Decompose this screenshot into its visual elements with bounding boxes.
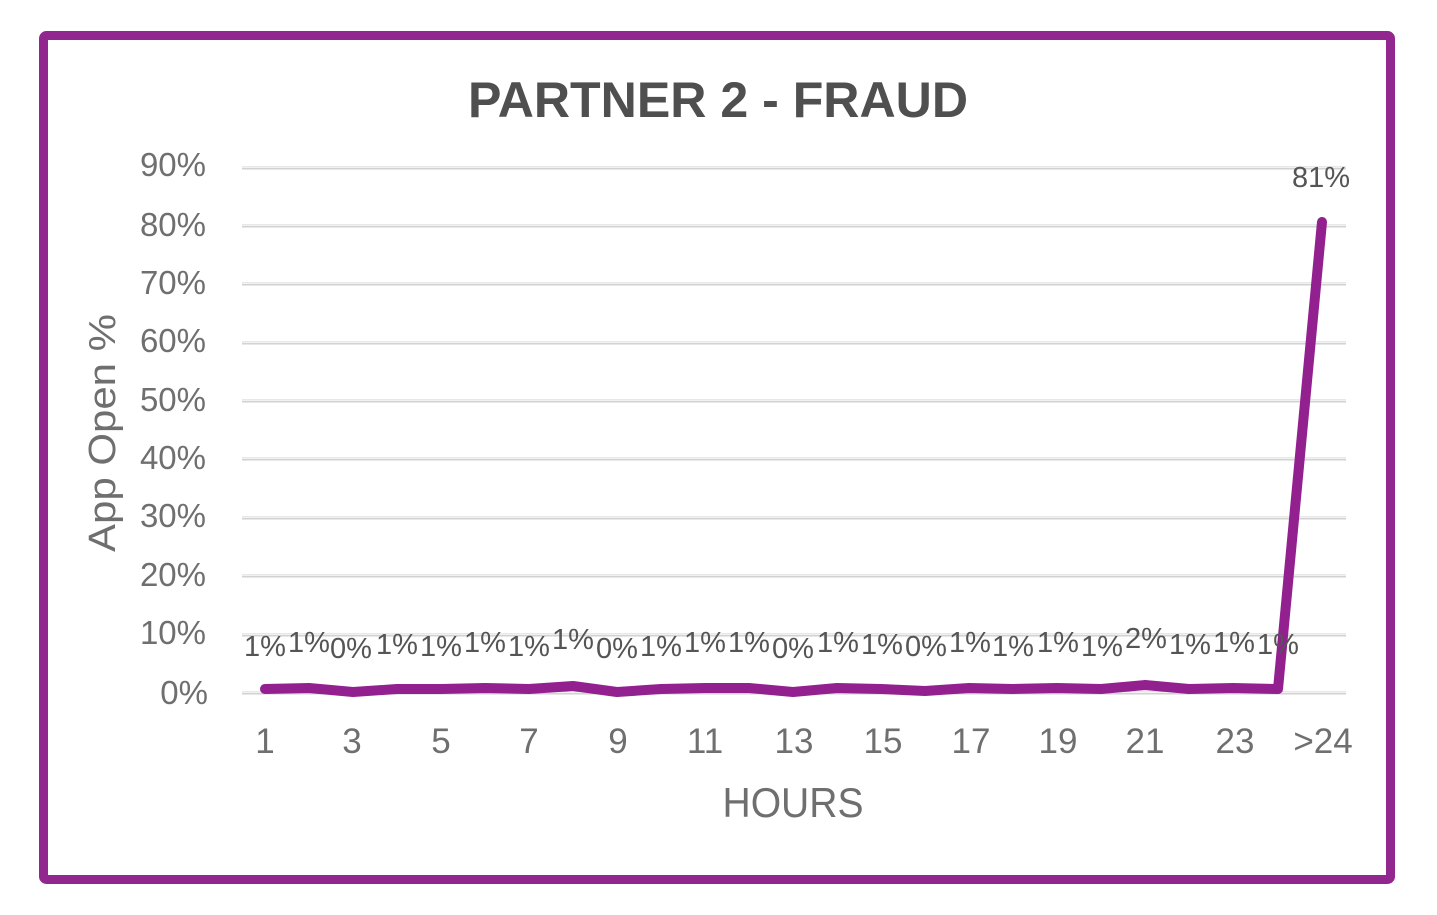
data labels: 81% <box>1292 162 1350 194</box>
y axis tick labels: 30% <box>140 497 206 534</box>
data labels: 1% <box>376 629 418 661</box>
x axis tick labels <box>255 722 1353 761</box>
y axis tick labels: 80% <box>140 206 206 243</box>
x axis title: HOURS <box>722 779 864 826</box>
y axis tick labels: 10% <box>140 614 206 651</box>
x axis tick labels: 1 <box>255 722 275 761</box>
data labels: 1% <box>1081 631 1123 663</box>
data labels: 1% <box>1257 629 1299 661</box>
y axis title: App Open % <box>82 314 124 552</box>
data labels: 0% <box>330 633 372 665</box>
x axis tick labels: 3 <box>342 722 362 761</box>
data labels: 1% <box>420 631 462 663</box>
data labels: 2% <box>1125 623 1167 655</box>
x axis tick labels: 23 <box>1216 722 1254 761</box>
data labels: 1% <box>552 624 594 656</box>
data labels: 0% <box>772 633 814 665</box>
data labels: 1% <box>728 627 770 659</box>
title: PARTNER 2 - FRAUD <box>468 72 968 128</box>
data labels: 1% <box>817 627 859 659</box>
data labels: 1% <box>244 631 286 663</box>
x axis tick labels: 15 <box>864 722 902 761</box>
x axis tick labels: 5 <box>431 722 451 761</box>
y axis tick labels: 50% <box>140 381 206 418</box>
y axis tick labels: 90% <box>140 146 206 183</box>
data labels: 1% <box>464 627 506 659</box>
y axis tick labels: 20% <box>140 556 206 593</box>
data labels: 1% <box>640 631 682 663</box>
y axis tick labels: 70% <box>140 264 206 301</box>
data labels: 1% <box>288 627 330 659</box>
x axis tick labels: 11 <box>687 722 723 761</box>
x axis tick labels: >24 <box>1293 722 1353 761</box>
x axis tick labels: 17 <box>952 722 990 761</box>
y axis tick labels: 40% <box>140 439 206 476</box>
data labels <box>244 162 1350 665</box>
x axis tick labels: 7 <box>519 722 539 761</box>
data labels: 1% <box>508 631 550 663</box>
x axis tick labels: 21 <box>1126 722 1164 761</box>
data labels: 1% <box>1169 629 1211 661</box>
y axis tick labels: 0% <box>160 674 208 711</box>
data labels: 1% <box>1213 627 1255 659</box>
y axis tick labels: 60% <box>140 322 206 359</box>
data labels: 0% <box>905 631 947 663</box>
data line <box>265 222 1322 692</box>
data labels: 1% <box>1037 627 1079 659</box>
data labels: 1% <box>992 631 1034 663</box>
x axis tick labels: 13 <box>775 722 813 761</box>
data labels: 0% <box>596 633 638 665</box>
x axis tick labels: 19 <box>1039 722 1077 761</box>
data labels: 1% <box>684 627 726 659</box>
data labels: 1% <box>949 627 991 659</box>
y axis tick labels <box>140 146 208 711</box>
data labels: 1% <box>861 629 903 661</box>
x axis tick labels: 9 <box>608 722 628 761</box>
